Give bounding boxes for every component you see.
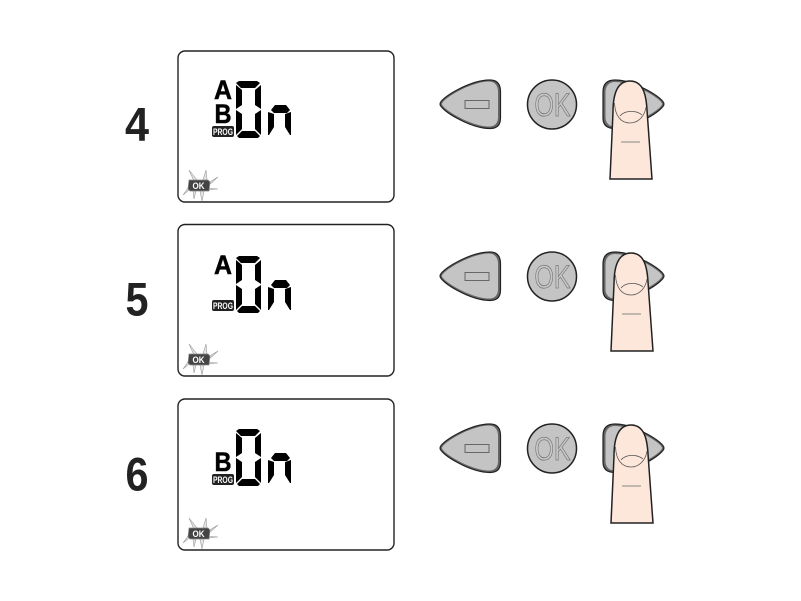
digit 0 — [236, 256, 261, 313]
ok button: OK — [534, 431, 570, 467]
ok button: OK — [534, 259, 570, 295]
letter n — [268, 105, 291, 135]
plus button pressed by finger — [603, 80, 664, 179]
prog badge: PROG — [213, 127, 233, 138]
step number 5: 5 — [126, 272, 148, 326]
ok button — [528, 80, 576, 129]
ok button — [528, 252, 576, 301]
row 6 — [126, 399, 664, 550]
step number 4: 4 — [125, 98, 149, 150]
blinking ok icon — [183, 170, 218, 201]
blinking ok icon — [183, 518, 218, 549]
prog badge: PROG — [213, 475, 233, 486]
plus button pressed by finger — [603, 424, 664, 523]
plus button pressed by finger — [603, 252, 664, 351]
letter B: B — [214, 447, 232, 477]
prog badge — [212, 474, 234, 486]
prog badge: PROG — [213, 301, 233, 312]
letter A: A — [214, 75, 232, 105]
blinking ok icon — [183, 344, 218, 375]
row 5 — [126, 224, 664, 376]
minus button — [440, 80, 500, 128]
digit 0 — [236, 429, 261, 486]
row 4 — [125, 51, 664, 202]
letter A: A — [214, 250, 232, 280]
prog badge — [212, 300, 234, 312]
minus button — [440, 252, 500, 300]
finger — [610, 81, 652, 179]
ok button — [528, 424, 576, 473]
letter B: B — [214, 99, 232, 129]
lcd panel — [178, 224, 394, 376]
digit 0 — [236, 81, 261, 138]
blinking ok icon: OK — [192, 529, 205, 540]
ok button: OK — [534, 87, 570, 123]
finger — [611, 253, 653, 351]
letter n — [268, 453, 291, 483]
blinking ok icon: OK — [192, 181, 205, 192]
blinking ok icon: OK — [192, 355, 205, 366]
minus button — [440, 424, 500, 472]
lcd panel — [178, 399, 394, 550]
step number 6: 6 — [126, 448, 148, 500]
lcd panel — [178, 51, 394, 202]
prog badge — [212, 126, 234, 138]
finger — [611, 425, 653, 523]
letter n — [268, 280, 291, 310]
